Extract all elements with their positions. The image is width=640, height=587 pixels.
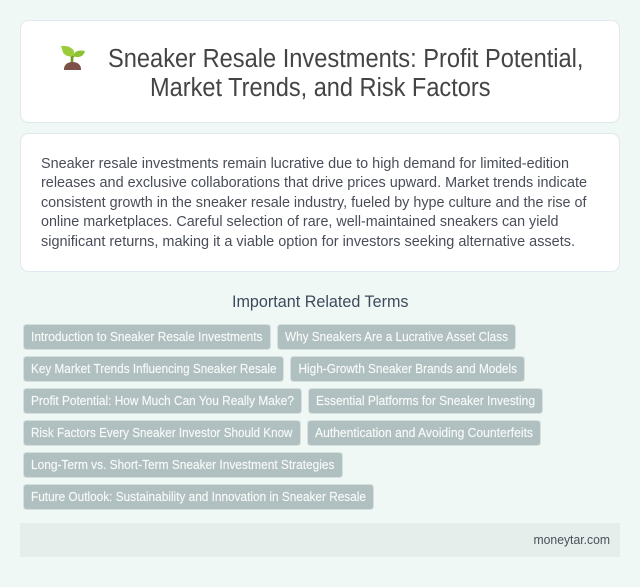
description text: consistent growth in the sneaker resale industry, fueled by hype culture and the rise of [41, 195, 587, 211]
footer source text: moneytar.com [534, 533, 610, 547]
title [108, 45, 584, 102]
tag [24, 388, 302, 414]
panel: title card [20, 20, 620, 122]
heading: important related terms: Important Related Terms [232, 293, 408, 311]
tag: Profit Potential: How Much Can You Really Make? [31, 394, 294, 408]
tag: Essential Platforms for Sneaker Investing [316, 394, 535, 408]
description text: online marketplaces. Careful selection of rare, well-maintained sneakers can yield [41, 214, 558, 230]
title: Sneaker Resale Investments: Profit Potential, [108, 45, 584, 73]
tag: Key Market Trends Influencing Sneaker Resale [31, 362, 276, 376]
tag: Future Outlook: Sustainability and Innovation in Sneaker Resale [31, 490, 366, 504]
description text: Sneaker resale investments remain lucrative due to high demand for limited-edition [41, 156, 569, 172]
title: Market Trends, and Risk Factors [150, 74, 490, 102]
tag [308, 388, 542, 414]
description text: significant returns, making it a viable option for investors seeking alternative assets. [41, 234, 575, 250]
tag [290, 356, 524, 382]
footer bar [20, 523, 620, 557]
description text [41, 156, 587, 250]
tag [24, 420, 300, 446]
tag [24, 452, 342, 478]
tag: Why Sneakers Are a Lucrative Asset Class [285, 330, 508, 344]
icon: sprout [61, 46, 85, 70]
tag [278, 324, 516, 350]
tag: Risk Factors Every Sneaker Investor Should Know [31, 426, 293, 440]
tag: High-Growth Sneaker Brands and Models [298, 362, 517, 376]
tag [24, 484, 374, 510]
tag [308, 420, 540, 446]
panel: description [20, 134, 620, 272]
tag [24, 324, 270, 350]
tag: Long-Term vs. Short-Term Sneaker Investment Strategies [31, 458, 334, 472]
panel: related terms tags [24, 324, 542, 510]
tag: Introduction to Sneaker Resale Investments [31, 330, 262, 344]
tag [24, 356, 284, 382]
tag: Authentication and Avoiding Counterfeits [315, 426, 533, 440]
description text: releases and exclusive collaborations that drive prices upward. Market trends indicate [41, 175, 587, 191]
